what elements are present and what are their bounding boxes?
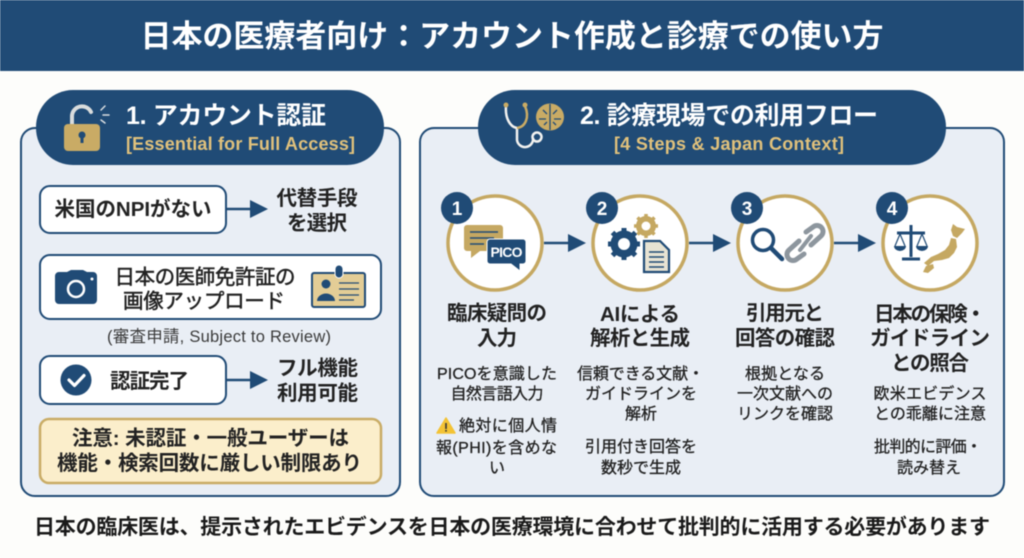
step 3: text: 根拠となる bbox=[745, 365, 825, 383]
panel: clinical workflow bbox=[420, 90, 1004, 496]
icon: magnifier and link bbox=[752, 225, 823, 261]
icon: scales and map of Japan bbox=[894, 224, 965, 273]
step: no NPI: 米国のNPIがない bbox=[54, 197, 212, 221]
flow arrows bbox=[544, 234, 876, 252]
text: full features available: フル機能 bbox=[277, 357, 358, 380]
step 2: icon bbox=[586, 192, 687, 290]
heading text: 2. 診療現場での利用フロー bbox=[580, 102, 878, 130]
step 4: text: 批判的に評価・ bbox=[874, 438, 982, 456]
text: full features available bbox=[277, 357, 358, 405]
icon: check bbox=[60, 364, 92, 396]
step: no NPI bbox=[40, 186, 226, 233]
panel heading: clinical workflow bbox=[478, 90, 946, 165]
step 2: text: 解析 bbox=[625, 405, 657, 423]
step 3: text: 一次文献への bbox=[737, 385, 833, 403]
step 2: text: 引用付き回答を bbox=[585, 438, 697, 456]
icon: open padlock bbox=[64, 106, 109, 151]
step 3: text: 回答の確認 bbox=[735, 326, 836, 350]
text: choose alternative: を選択 bbox=[287, 212, 348, 235]
step 2: text: 解析と生成 bbox=[590, 326, 690, 350]
step 4: icon bbox=[876, 192, 977, 290]
text: choose alternative bbox=[276, 187, 358, 235]
footer message: 日本の臨床医は、提示されたエビデンスを日本の医療環境に合わせて批判的に活用する必要があります bbox=[34, 515, 990, 539]
icon: camera bbox=[55, 270, 97, 304]
step 1: text: 臨床疑問の bbox=[447, 302, 547, 325]
badge 2: 2 bbox=[597, 199, 607, 220]
heading subtitle: [4 Steps & Japan Context] bbox=[614, 134, 844, 154]
step: verification complete: 認証完了 bbox=[110, 370, 189, 393]
step 4: text: 日本の保険・ bbox=[874, 303, 986, 326]
step 4: text: との照合 bbox=[891, 352, 970, 375]
panel: account verification bbox=[21, 90, 400, 496]
step 4: text: 読み替え bbox=[897, 459, 961, 477]
text: full features available: 利用可能 bbox=[277, 382, 358, 405]
step 1: text: PICOを意識した bbox=[437, 365, 557, 383]
step 3: text: リンクを確認 bbox=[737, 405, 833, 423]
step 2: text: ガイドラインを bbox=[585, 385, 697, 403]
callout: caution: 注意: 未認証・一般ユーザーは bbox=[72, 427, 349, 450]
step 1: text: 入力 bbox=[477, 327, 517, 350]
step 2: text bbox=[577, 303, 704, 477]
step 4: text: 欧米エビデンス bbox=[874, 384, 986, 403]
icon: stethoscope and brain bbox=[504, 102, 564, 147]
step: upload licence image bbox=[40, 255, 381, 319]
arrow: to full access bbox=[226, 371, 268, 389]
header banner bbox=[0, 0, 1024, 71]
step 1: text bbox=[436, 302, 557, 477]
badge 1: 1 bbox=[452, 199, 463, 220]
icon: ID card bbox=[312, 265, 365, 307]
step 3: icon bbox=[731, 192, 832, 290]
arrow: to alternative bbox=[226, 200, 268, 218]
step 1: icon bbox=[441, 192, 542, 290]
callout: caution: 機能・検索回数に厳しい制限あり bbox=[57, 452, 362, 475]
step 1: text: 自然言語入力 bbox=[450, 385, 544, 403]
callout: caution bbox=[40, 419, 381, 483]
step 2: text: 信頼できる文献・ bbox=[577, 365, 704, 383]
title: 日本の医療者向け：アカウント作成と診療での使い方 bbox=[140, 19, 884, 54]
heading subtitle: [Essential for Full Access] bbox=[126, 134, 355, 154]
badge 4: 4 bbox=[887, 199, 898, 220]
step 4: text: ガイドライン bbox=[870, 327, 990, 350]
step 3: text: 引用元と bbox=[746, 302, 824, 325]
step 1: text: 報(PHI)を含めな bbox=[436, 439, 557, 457]
step 1: text: 絶対に個人情 bbox=[459, 417, 557, 435]
step 1: text: い bbox=[489, 460, 505, 477]
upload text: 日本の医師免許証の bbox=[114, 266, 296, 289]
step 4: text: との乖離に注意 bbox=[874, 405, 986, 423]
step: upload licence image: 画像アップロード bbox=[123, 290, 285, 313]
icon: PICO speech bubbles: PICO bbox=[490, 244, 523, 260]
text: choose alternative: 代替手段 bbox=[276, 187, 358, 210]
icon: gears and document bbox=[608, 214, 669, 272]
step: verification complete bbox=[40, 356, 226, 404]
step 4: text bbox=[870, 303, 990, 477]
panel heading: account verification bbox=[36, 90, 384, 165]
heading text: 1. アカウント認証 bbox=[126, 102, 326, 130]
badge 3: 3 bbox=[742, 199, 752, 220]
icon: warning bbox=[437, 418, 455, 433]
step 2: text: 数秒で生成 bbox=[601, 459, 681, 477]
step 3: text bbox=[735, 302, 836, 423]
step 2: text: AIによる bbox=[600, 303, 680, 326]
note: subject to review: (審査申請, Subject to Review) bbox=[107, 327, 331, 346]
